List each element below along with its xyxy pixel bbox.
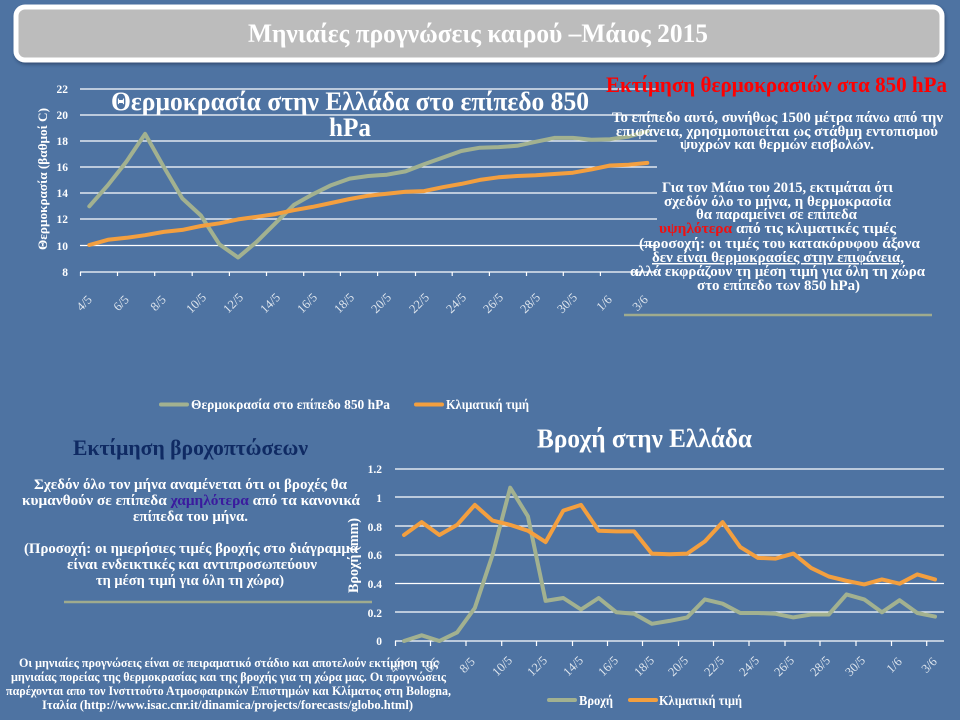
x axis labels: 24/5: [443, 290, 469, 316]
x axis labels: 10/5: [489, 653, 515, 679]
x axis labels: 8/5: [457, 655, 478, 676]
x axis labels: 30/5: [842, 653, 868, 679]
paragraph: May estimate: Για τον Μάιο του 2015, εκτιμάται ότι: [662, 180, 893, 196]
x axis labels: 1/6: [594, 293, 615, 314]
x axis labels: 3/6: [630, 293, 651, 314]
y axis labels: 10: [56, 241, 68, 253]
legend: Βροχή: [579, 693, 613, 708]
paragraph: rainfall outlook: κυμανθούν σε επίπεδα χαμηλότερα από τα κανονικά: [22, 493, 361, 509]
paragraph: May estimate: στο επίπεδο των 850 hPa): [697, 278, 860, 294]
panel: temperature estimate text: [606, 72, 947, 315]
y axis labels: 1.2: [368, 464, 382, 476]
x axis labels: 28/5: [807, 653, 833, 679]
header banner: [16, 7, 942, 60]
chart title: hPa: [329, 113, 371, 142]
y axis labels: 22: [56, 84, 68, 96]
x axis labels: 16/5: [595, 653, 621, 679]
x axis labels: 4/5: [74, 293, 95, 314]
x axis labels: 12/5: [220, 290, 246, 316]
x axis labels: 18/5: [631, 653, 657, 679]
paragraph: May estimate: δεν είναι θερμοκρασίες στην επιφάνεια,: [652, 250, 904, 266]
y axis labels: 18: [56, 136, 68, 148]
chart title: Βροχή στην Ελλάδα: [537, 424, 752, 453]
x axis labels: 3/6: [919, 655, 940, 676]
line chart: rainfall: [346, 424, 944, 708]
paragraph: May estimate: σχεδόν όλο το μήνα, η θερμοκρασία: [664, 194, 892, 210]
y axis labels: 20: [56, 110, 68, 122]
y axis labels: 0: [376, 636, 382, 648]
y axis labels: 8: [62, 267, 68, 279]
x axis labels: 4/5: [387, 655, 408, 676]
legend: Θερμοκρασία στο επίπεδο 850 hPa: [191, 397, 390, 412]
x axis labels: 6/5: [422, 655, 443, 676]
paragraph: rainfall note: (Προσοχή: οι ημερήσιες τιμές βροχής στο διάγραμμα: [24, 541, 359, 557]
x axis labels: 26/5: [771, 653, 797, 679]
y axis title: Βροχή (mm): [346, 518, 362, 593]
x axis labels: 6/5: [111, 293, 132, 314]
footnote: forecast source: Οι μηνιαίες προγνώσεις είναι σε πειραματικό στάδιο και αποτελούν εκτίμηση της: [19, 655, 438, 670]
y axis labels: [56, 84, 68, 279]
series: climatology: [404, 505, 935, 584]
paragraph: May estimate: αλλά εκφράζουν τη μέση τιμή για όλη τη χώρα: [630, 264, 926, 280]
gridlines: [395, 469, 944, 646]
paragraph: rainfall note: τη μέση τιμή για όλη τη χώρα): [96, 573, 284, 589]
x axis labels: 16/5: [294, 290, 320, 316]
y axis labels: [368, 464, 382, 648]
paragraph: May estimate: [630, 180, 926, 294]
x axis labels: 28/5: [517, 290, 543, 316]
y axis labels: 14: [56, 188, 68, 200]
paragraph: rainfall note: είναι ενδεικτικές και αντιπροσωπεύουν: [67, 557, 317, 573]
legend: Κλιματική τιμή: [446, 397, 529, 412]
x axis labels: 14/5: [257, 290, 283, 316]
x axis labels: 1/6: [884, 655, 905, 676]
x axis labels: 26/5: [480, 290, 506, 316]
heading: Εκτίμηση θερμοκρασιών στα 850 hPa: [606, 72, 947, 97]
paragraph: level explanation: επιφάνεια, χρησιμοποιείται ως στάθμη εντοπισμού: [616, 124, 938, 140]
paragraph: May estimate: υψηλότερα από τις κλιματικές τιμές: [659, 221, 897, 237]
footnote: forecast source: παρέχονται απο τον Ινστιτούτο Ατμοσφαιρικών Επιστημών και Κλίματος στη Bologna,: [6, 683, 451, 698]
title: Μηνιαίες προγνώσεις καιρού –Μάιος 2015: [248, 19, 708, 48]
y axis labels: 0.4: [368, 579, 382, 591]
x axis labels: 14/5: [560, 653, 586, 679]
x axis labels: 10/5: [183, 290, 209, 316]
paragraph: rainfall outlook: Σχεδόν όλο τον μήνα αναμένεται ότι οι βροχές θα: [34, 477, 348, 493]
paragraph: rainfall outlook: [22, 477, 361, 525]
x axis labels: 8/5: [148, 293, 169, 314]
panel: rainfall estimate text: [22, 435, 372, 602]
paragraph: rainfall note: [24, 541, 359, 589]
x axis labels: 30/5: [554, 290, 580, 316]
heading: Εκτίμηση βροχοπτώσεων: [73, 435, 308, 460]
y axis labels: 1: [376, 493, 382, 505]
y axis labels: 0.8: [368, 522, 382, 534]
series: temperature: [89, 131, 647, 258]
series: climatology: [89, 163, 647, 245]
legend: Κλιματική τιμή: [659, 693, 742, 708]
footnote: forecast source: [6, 655, 451, 712]
x axis labels: 12/5: [524, 653, 550, 679]
x axis labels: 22/5: [406, 290, 432, 316]
x axis labels: 20/5: [368, 290, 394, 316]
paragraph: level explanation: ψυχρών και θερμών εισβολών.: [680, 137, 874, 153]
x axis labels: 24/5: [736, 653, 762, 679]
chart title: Θερμοκρασία στην Ελλάδα στο επίπεδο 850: [111, 87, 589, 116]
footnote: forecast source: Ιταλία (http://www.isac.cnr.it/dinamica/projects/forecasts/globo.html): [42, 697, 413, 712]
paragraph: level explanation: [612, 110, 943, 153]
line chart: temperature at 850 hPa: [35, 84, 657, 412]
series: rainfall: [404, 488, 935, 641]
y axis labels: 0.2: [368, 608, 382, 620]
paragraph: level explanation: Το επίπεδο αυτό, συνήθως 1500 μέτρα πάνω από την: [612, 110, 943, 126]
x axis labels: 18/5: [331, 290, 357, 316]
y axis labels: 16: [56, 162, 68, 174]
y axis title: Θερμοκρασία (βαθμοί C): [35, 108, 50, 250]
footnote: forecast source: μηνιαίας πορείας της θερμοκρασίας και της βροχής για τη χώρα μας. Οι προγνώσεις: [11, 669, 446, 684]
gridlines: [80, 89, 657, 276]
chart title: [111, 87, 589, 142]
y axis labels: 12: [56, 214, 68, 226]
paragraph: rainfall outlook: επίπεδα του μήνα.: [133, 509, 248, 525]
paragraph: May estimate: (προσοχή: οι τιμές του κατακόρυφου άξονα: [639, 236, 921, 252]
x axis labels: 20/5: [665, 653, 691, 679]
legend: [161, 397, 529, 412]
x axis labels: [387, 653, 940, 679]
x axis labels: [74, 290, 651, 316]
paragraph: May estimate: θα παραμείνει σε επίπεδα: [696, 207, 858, 223]
legend: [549, 693, 742, 708]
x axis labels: 22/5: [701, 653, 727, 679]
y axis labels: 0.6: [368, 550, 382, 562]
